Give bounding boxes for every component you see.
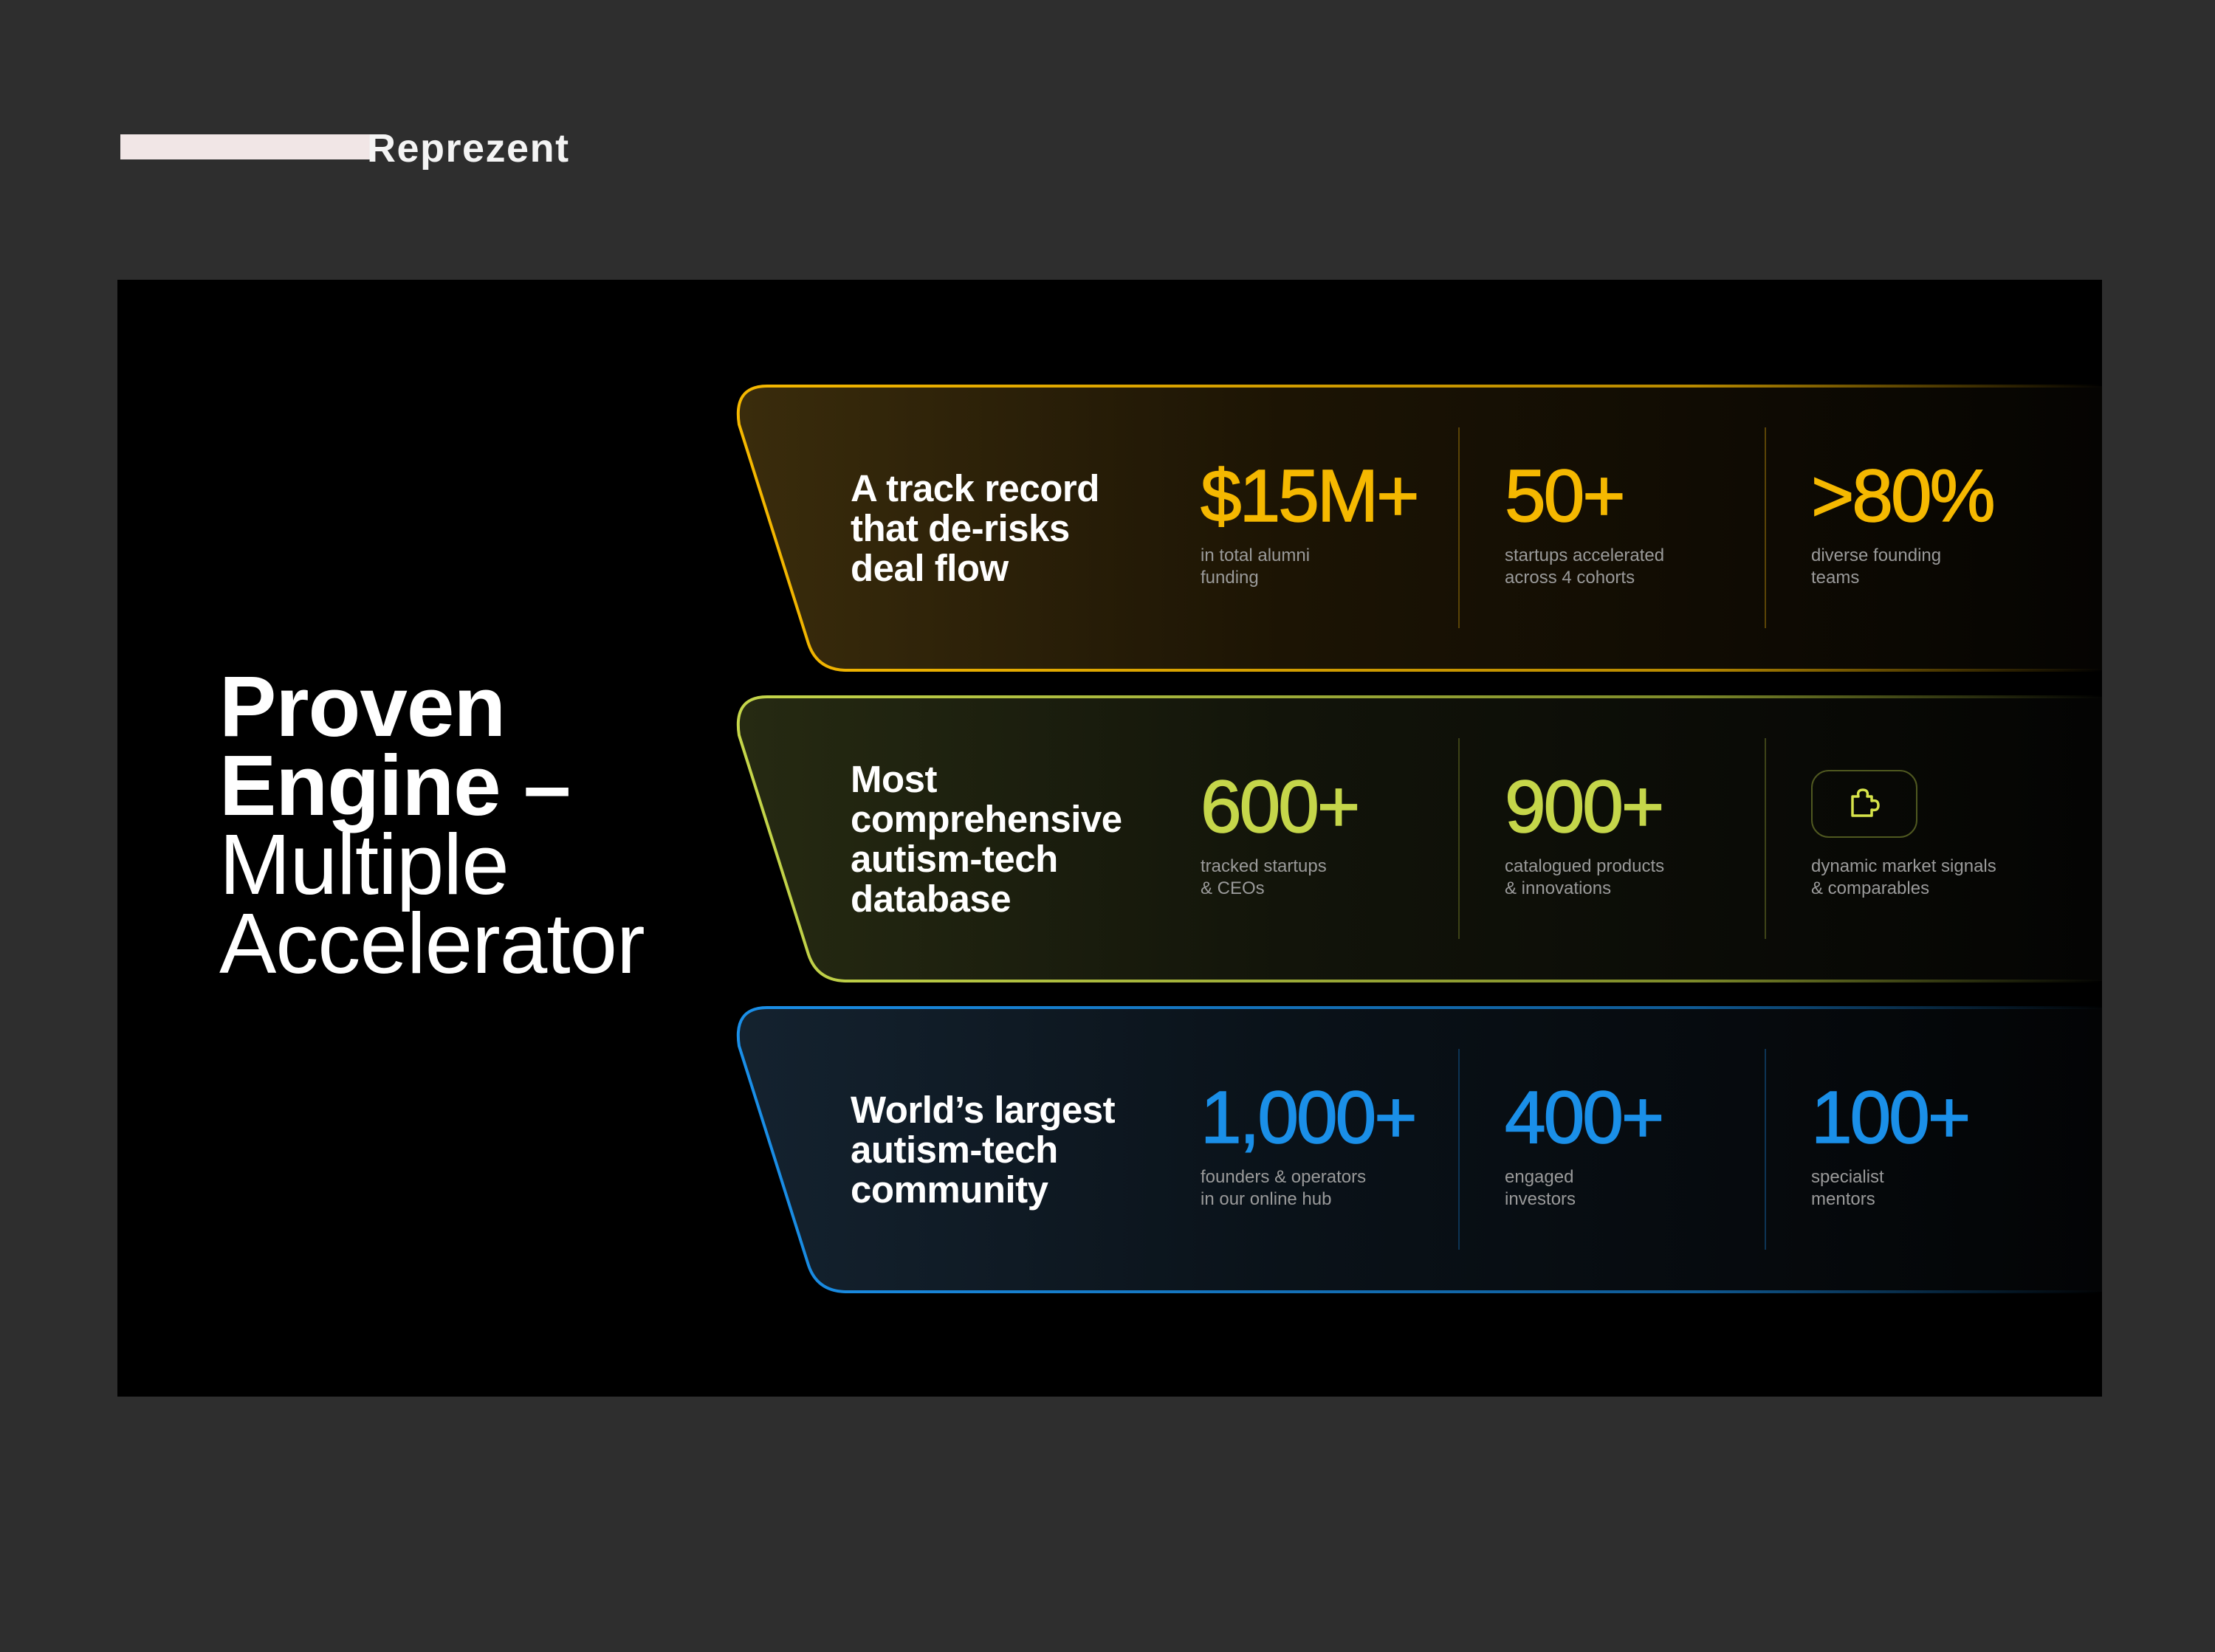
panel: database: & innovations <box>1505 878 1611 898</box>
heading <box>851 1088 1115 1211</box>
heading: database <box>851 877 1011 920</box>
panel: community: specialist <box>1811 1167 1884 1187</box>
panel: database: catalogued products <box>1505 856 1664 876</box>
panel: track record: >80% <box>1811 455 1993 537</box>
panel: community: founders & operators <box>1201 1167 1366 1187</box>
stat: 900 <box>1505 765 1664 898</box>
panel: database: dynamic market signals <box>1811 856 1996 876</box>
panel: database: tracked startups <box>1201 856 1327 876</box>
panel: track record <box>737 385 2097 672</box>
panel: database: & comparables <box>1811 878 1929 898</box>
panel: database: 600+ <box>1201 765 1358 848</box>
panel: community: 100+ <box>1811 1076 1968 1159</box>
panel: community: investors <box>1505 1189 1576 1209</box>
stat: 15M <box>1201 455 1418 588</box>
panel: database: & CEOs <box>1201 878 1265 898</box>
panel: community: 1,000+ <box>1201 1076 1415 1159</box>
title: Multiple <box>219 816 509 912</box>
panel: database <box>737 695 2092 982</box>
panel: track record: diverse founding <box>1811 545 1941 565</box>
panel: community: 400+ <box>1505 1076 1662 1159</box>
title: Accelerator <box>219 895 645 991</box>
title: Engine – <box>219 737 570 833</box>
heading: A track record <box>851 467 1099 509</box>
panel: track record: funding <box>1201 568 1259 588</box>
stat: 400 <box>1505 1076 1662 1209</box>
icon: puzzle <box>1811 770 1917 838</box>
heading: comprehensive <box>851 797 1122 840</box>
panel: track record: $15M+ <box>1201 455 1418 537</box>
panel: track record: 50+ <box>1505 455 1624 537</box>
stat: 1000 <box>1201 1076 1415 1209</box>
panel: database: 900+ <box>1505 765 1662 848</box>
logo <box>120 126 570 171</box>
title <box>219 658 645 991</box>
heading: that de-risks <box>851 506 1070 549</box>
stat: 100 <box>1811 1076 1968 1209</box>
heading <box>851 467 1099 589</box>
heading: Most <box>851 757 937 800</box>
heading: community <box>851 1168 1048 1211</box>
title: Proven <box>219 658 505 754</box>
card background <box>117 280 2102 1397</box>
stat: 600 <box>1201 765 1358 898</box>
stat: 80% <box>1811 455 1993 588</box>
panel: community: in our online hub <box>1201 1189 1331 1209</box>
panel: track record: startups accelerated <box>1505 545 1664 565</box>
heading: autism-tech <box>851 837 1058 880</box>
heading: deal flow <box>851 546 1009 589</box>
logo: Reprezent <box>367 126 570 171</box>
panel: community: mentors <box>1811 1189 1875 1209</box>
panel: track record: teams <box>1811 568 1859 588</box>
panel: community: engaged <box>1505 1167 1573 1187</box>
heading: World’s largest <box>851 1088 1115 1131</box>
heading: autism-tech <box>851 1128 1058 1171</box>
heading <box>851 757 1122 920</box>
panel: community <box>737 1006 2096 1293</box>
stat: market signals with icon <box>1811 770 1996 898</box>
panel: track record: across 4 cohorts <box>1505 568 1635 588</box>
stat: 50 <box>1505 455 1664 588</box>
panel: track record: in total alumni <box>1201 545 1310 565</box>
